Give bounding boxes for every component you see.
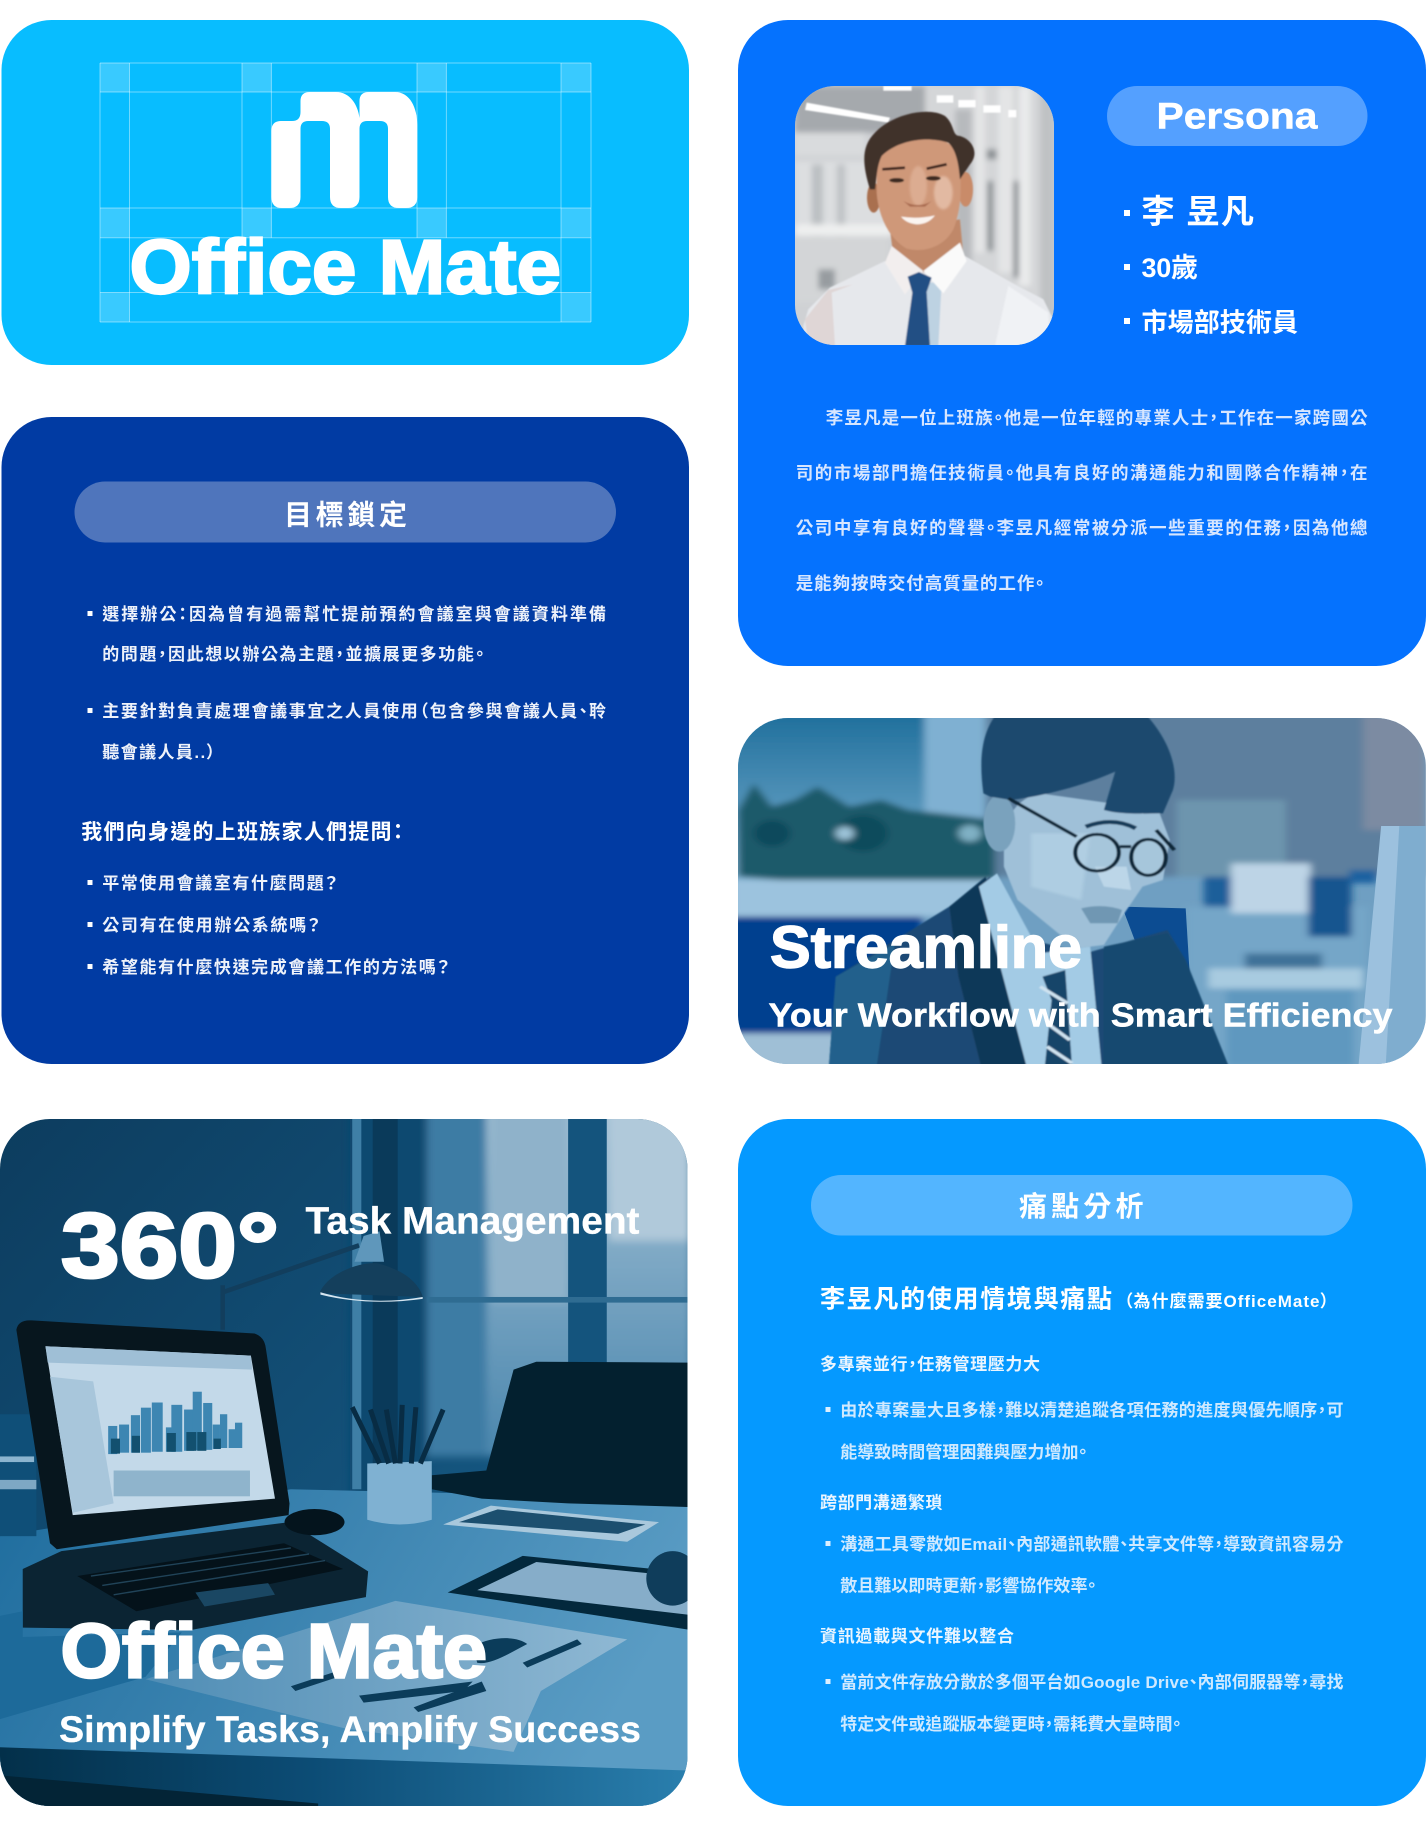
panel: laptop desk photo [0, 1100, 699, 1835]
headline: Streamline [770, 915, 1082, 981]
right mouse [646, 1551, 688, 1606]
tie [1043, 970, 1072, 1067]
glasses [1075, 834, 1166, 875]
pain point 2 [820, 1492, 1344, 1595]
shirt [979, 873, 1102, 1067]
icon: Office Mate m logo [271, 92, 417, 208]
pain point 1: 能導致時間管理困難與壓力增加。 [840, 1442, 1087, 1462]
hair [981, 713, 1175, 814]
bullet list: questions: 公司有在使用辦公系統嗎？ [102, 915, 320, 935]
heading pill [811, 1175, 1352, 1236]
bullet list: focus: 主要針對負責處理會議事宜之人員使用（包含參與會議人員、聆 [102, 701, 606, 721]
bullet list: focus [88, 604, 606, 762]
section heading [820, 1286, 1329, 1314]
pain point 1: 多專案並行，任務管理壓力大 [820, 1354, 1040, 1374]
hair [864, 112, 974, 189]
heading pill: 目標鎖定 [284, 500, 407, 530]
laptop base [23, 1522, 368, 1630]
heading pill [74, 482, 616, 542]
panel: persona [738, 20, 1426, 666]
neck and face [1004, 793, 1170, 948]
bullet list: focus: 的問題，因此想以辦公為主題，並擴展更多功能。 [102, 644, 484, 664]
bullet list: questions: 希望能有什麼快速完成會議工作的方法嗎？ [102, 957, 449, 977]
desk [0, 1489, 691, 1835]
persona description: 司的市場部門擔任技術員。他具有良好的溝通能力和團隊合作精神，在 [796, 463, 1368, 483]
bullet list: questions [88, 873, 449, 977]
persona description: 是能夠按時交付高質量的工作。 [796, 573, 1044, 593]
photo: man with glasses at desk [738, 718, 1426, 1064]
pain point 2: 溝通工具零散如Email、內部通訊軟體、共享文件等，導致資訊容易分 [840, 1534, 1344, 1554]
laptop lid [16, 1320, 290, 1549]
pain point 3: 當前文件存放分散於多個平台如Google Drive、內部伺服器等，尋找 [840, 1672, 1344, 1692]
persona description: 公司中享有良好的聲譽。李昱凡經常被分派一些重要的任務，因為他總 [796, 518, 1368, 538]
ears [958, 172, 973, 207]
pain point 1: 由於專案量大且多樣，難以清楚追蹤各項任務的進度與優先順序，可 [840, 1400, 1344, 1420]
face [877, 137, 961, 250]
pain point 1 [820, 1354, 1344, 1462]
persona facts: 市場部技術員 [1142, 308, 1298, 338]
persona pill: Persona [1156, 96, 1318, 136]
persona facts: 李 昱凡 [1142, 193, 1254, 230]
photo: laptop on office desk [0, 1100, 699, 1835]
bullet list: focus: 選擇辦公：因為曾有過需幫忙提前預約會議室與會議資料準備 [102, 604, 606, 624]
lamp [223, 1245, 359, 1330]
persona facts: 30歲 [1142, 253, 1198, 283]
pain point 3: 資訊過載與文件難以整合 [820, 1626, 1014, 1646]
question heading: 我們向身邊的上班族家人們提問： [81, 820, 403, 844]
logo grid [100, 63, 591, 322]
collar [885, 246, 923, 294]
section heading: 李昱凡的使用情境與痛點 [820, 1286, 1112, 1314]
bullet list: focus: 聽會議人員..） [102, 742, 215, 762]
logo wordmark: Office Mate [130, 224, 561, 310]
tagline: Simplify Tasks, Amplify Success [59, 1709, 641, 1750]
panel: logo construction grid [2, 20, 689, 365]
pain point 2: 散且難以即時更新，影響協作效率。 [840, 1575, 1096, 1595]
headline: Office Mate: Office Mate [60, 1609, 487, 1695]
panel: target audience [2, 417, 689, 1064]
chair [432, 1362, 691, 1507]
jacket [829, 877, 1180, 1064]
papers [145, 1601, 627, 1752]
brows and eyes [882, 164, 947, 169]
tie [905, 272, 932, 346]
label: Task Management: Task Management [306, 1201, 640, 1243]
persona pill [1107, 86, 1368, 146]
smile [901, 215, 935, 224]
bullet list: questions: 平常使用會議室有什麼問題？ [102, 873, 337, 893]
pain point 2: 跨部門溝通繁瑣 [820, 1492, 942, 1512]
heading pill: 痛點分析 [1019, 1191, 1144, 1222]
section heading: （為什麼需要OfficeMate） [1124, 1291, 1329, 1311]
panel: pain points [738, 1119, 1426, 1806]
tablet [448, 1556, 691, 1630]
shirt [803, 256, 1053, 346]
photo: persona portrait [795, 86, 1055, 346]
mouse [285, 1509, 345, 1535]
panel: streamline photo [738, 718, 1426, 1064]
right keyboard [443, 1506, 659, 1542]
neck [890, 219, 963, 276]
pain point 3: 特定文件或追蹤版本變更時，需耗費大量時間。 [840, 1714, 1181, 1734]
persona description: 李昱凡是一位上班族。他是一位年輕的專業人士，工作在一家跨國公 [826, 408, 1368, 428]
books at left [0, 1414, 36, 1536]
headline: 360 degrees: 360° [61, 1195, 279, 1297]
persona description [796, 408, 1368, 593]
subheadline: Your Workflow with Smart Efficiency [768, 997, 1393, 1034]
pen cup [367, 1461, 432, 1524]
pain point 3 [820, 1626, 1344, 1734]
ear [983, 795, 1015, 852]
persona facts [1124, 193, 1298, 338]
